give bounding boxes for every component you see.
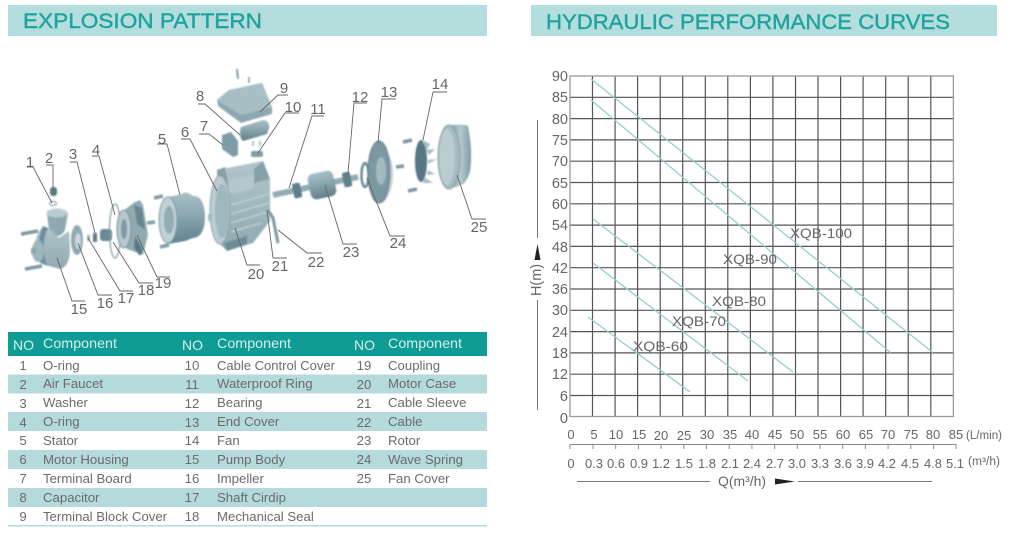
pump body with bolts <box>21 208 70 269</box>
part numbers: 18 <box>138 282 154 299</box>
table column 2: Cable Control Cover <box>217 358 336 373</box>
x axis m3/h labels: 0.3 <box>585 456 603 471</box>
x axis m3/h labels: 3.3 <box>811 456 829 471</box>
part numbers: 16 <box>97 295 113 312</box>
table column 2: 12 <box>185 396 199 411</box>
heading: hydraulic performance curves: HYDRAULIC PERFORMANCE CURVES <box>546 11 950 34</box>
y axis labels: 0 <box>560 411 568 427</box>
x axis m3/h labels: (m³/h) <box>968 456 1000 468</box>
part numbers: 9 <box>280 80 288 97</box>
table column 3: Cable Sleeve <box>388 395 466 410</box>
table column 1: Terminal Board <box>43 471 132 486</box>
fan <box>415 139 437 183</box>
table column 2: 13 <box>185 415 199 430</box>
x axis L/min labels: 15 <box>632 427 646 442</box>
y axis labels: 60 <box>552 197 568 213</box>
y axis labels: 90 <box>552 69 568 85</box>
x axis L/min labels: 5 <box>590 427 598 442</box>
table column 3: Coupling <box>388 358 440 373</box>
x axis m3/h labels: 2.4 <box>743 456 761 471</box>
part numbers: 24 <box>390 235 406 252</box>
table column 1: 4 <box>19 415 27 430</box>
table column 1: Terminal Block Cover <box>43 509 168 524</box>
x axis L/min labels: 10 <box>609 427 623 442</box>
cable control cover <box>251 141 263 157</box>
part numbers: 8 <box>196 88 204 105</box>
stator <box>159 192 205 244</box>
y axis labels: 36 <box>552 282 568 298</box>
x axis L/min labels: 85 <box>949 427 963 442</box>
table column 2: Bearing <box>217 395 262 410</box>
table column 2: Mechanical Seal <box>217 509 314 524</box>
x axis title with arrow <box>577 473 932 489</box>
table column 1: 6 <box>19 452 27 467</box>
table column 2: 10 <box>185 358 199 373</box>
table header: NO <box>13 337 34 353</box>
table column 3 <box>357 358 466 486</box>
table column 3: Motor Case <box>388 376 456 391</box>
table column 1: O-ring <box>43 414 80 429</box>
x axis m3/h labels: 3.0 <box>788 456 806 471</box>
capacitor <box>240 120 269 141</box>
y axis labels: 24 <box>552 325 568 341</box>
table header: NO <box>182 337 203 353</box>
part numbers: 22 <box>308 254 324 271</box>
x axis L/min labels: 65 <box>859 427 873 442</box>
part numbers: 12 <box>352 89 368 106</box>
x axis m3/h labels: 3.9 <box>856 456 874 471</box>
table column 1: 9 <box>19 509 27 524</box>
y axis labels: 6 <box>560 389 568 405</box>
table header: Component <box>43 335 117 351</box>
x axis L/min labels: 35 <box>723 427 737 442</box>
x axis L/min labels: (L/min) <box>966 430 1002 442</box>
table column 1: Motor Housing <box>43 452 129 467</box>
table column 2: Waterproof Ring <box>217 376 313 391</box>
y axis labels: 75 <box>552 133 568 149</box>
y axis labels: 80 <box>552 112 568 128</box>
part numbers: 15 <box>71 301 87 318</box>
x axis L/min labels: 40 <box>745 427 759 442</box>
air faucet and o-ring <box>50 187 57 206</box>
part numbers: 10 <box>285 99 301 116</box>
part numbers: 4 <box>92 142 100 159</box>
table column 3: Rotor <box>388 433 421 448</box>
y axis labels: 48 <box>552 240 568 256</box>
part numbers: 20 <box>248 266 264 283</box>
table header: Component <box>388 335 462 351</box>
x axis m3/h labels: 2.1 <box>721 456 739 471</box>
rotor assembly <box>273 170 358 200</box>
table column 2: Shaft Cirdip <box>217 490 286 505</box>
y axis labels: 65 <box>552 176 568 192</box>
table column 1: 3 <box>19 396 27 411</box>
table column 1: Air Faucet <box>43 376 103 391</box>
table column 3: Fan Cover <box>388 471 450 486</box>
table column 2: 16 <box>185 471 199 486</box>
terminal board <box>222 132 238 157</box>
x axis L/min labels: 60 <box>836 427 850 442</box>
part numbers: 7 <box>200 118 208 135</box>
impeller <box>71 225 83 255</box>
end cover with bolts <box>368 140 417 203</box>
x axis L/min labels: 70 <box>881 427 895 442</box>
y axis labels: 85 <box>552 90 568 106</box>
x axis L/min labels: 45 <box>768 427 782 442</box>
table header: NO <box>354 337 375 353</box>
curve labels: XQB-80 <box>712 293 766 309</box>
heading: explosion pattern: EXPLOSION PATTERN <box>23 10 262 33</box>
part numbers: 6 <box>181 124 189 141</box>
y axis labels <box>552 69 568 427</box>
x axis L/min labels: 75 <box>904 427 918 442</box>
part numbers: 23 <box>343 244 359 261</box>
x axis m3/h labels <box>567 456 1000 471</box>
x axis L/min labels: 55 <box>813 427 827 442</box>
y axis labels: 42 <box>552 261 568 277</box>
part numbers: 1 <box>26 154 34 171</box>
wave spring <box>362 163 368 187</box>
fan cover <box>438 124 471 189</box>
curve labels: XQB-100 <box>790 225 852 241</box>
exploded view diagram <box>21 69 487 318</box>
table column 3: Cable <box>388 414 422 429</box>
x axis title with arrow: Q(m³/h) <box>718 473 766 489</box>
x axis m3/h labels: 0.6 <box>607 456 625 471</box>
table column 1: 2 <box>19 377 27 392</box>
table column 3: 22 <box>357 415 371 430</box>
curve labels <box>633 225 852 354</box>
table column 2: Impeller <box>217 471 265 486</box>
curve labels: XQB-70 <box>672 313 726 329</box>
part numbers: 17 <box>118 290 134 307</box>
part numbers: 14 <box>432 76 448 93</box>
table column 1: 1 <box>19 358 27 373</box>
x axis m3/h labels: 0 <box>567 456 575 471</box>
part numbers: 13 <box>381 84 397 101</box>
table column 3: Wave Spring <box>388 452 463 467</box>
y axis labels: 12 <box>552 367 568 383</box>
y axis labels: 30 <box>552 303 568 319</box>
x axis m3/h labels: 0.9 <box>630 456 648 471</box>
heading: explosion pattern <box>8 5 487 36</box>
table column 2: 14 <box>185 433 199 448</box>
y axis title with arrow: H(m) <box>529 264 545 296</box>
table column 1: O-ring <box>43 358 80 373</box>
table column 1 <box>19 358 168 524</box>
table column 2: Fan <box>217 433 240 448</box>
x axis m3/h labels: 4.2 <box>878 456 896 471</box>
washer, clip and seal <box>87 229 112 242</box>
x axis L/min labels: 30 <box>700 427 714 442</box>
part numbers: 5 <box>158 131 166 148</box>
table column 3: 25 <box>357 471 371 486</box>
part numbers <box>26 76 487 318</box>
y axis labels: 54 <box>552 218 568 234</box>
x axis m3/h labels: 3.6 <box>834 456 852 471</box>
table header: Component <box>217 335 291 351</box>
x axis L/min labels: 50 <box>790 427 804 442</box>
part numbers: 2 <box>45 150 53 167</box>
x axis L/min labels: 80 <box>926 427 940 442</box>
x axis m3/h labels: 4.5 <box>901 456 919 471</box>
performance curves <box>588 79 933 392</box>
flange bolts <box>147 196 169 247</box>
x axis L/min labels: 25 <box>677 428 691 443</box>
table column 2: 15 <box>185 452 199 467</box>
table column 3: 24 <box>357 452 371 467</box>
y axis labels: 18 <box>552 346 568 362</box>
motor housing and case <box>208 161 278 251</box>
terminal block cover <box>217 69 272 123</box>
table column 2 <box>185 358 336 524</box>
table column 1: 8 <box>19 490 27 505</box>
table column 2: 17 <box>185 490 199 505</box>
table column 1: Capacitor <box>43 490 100 505</box>
o-ring seal <box>110 204 120 258</box>
part numbers: 19 <box>155 275 171 292</box>
x axis L/min labels: 0 <box>567 427 575 442</box>
x axis ticks <box>570 444 956 449</box>
leader lines <box>27 92 486 301</box>
table stripes <box>8 374 487 526</box>
x axis m3/h labels: 1.8 <box>698 456 716 471</box>
x axis m3/h labels: 5.1 <box>946 456 964 471</box>
components table <box>8 332 487 526</box>
x axis m3/h labels: 4.8 <box>924 456 942 471</box>
part numbers: 25 <box>471 219 487 236</box>
table column 1: 5 <box>19 433 27 448</box>
table column 3: 21 <box>357 396 371 411</box>
x axis m3/h labels: 1.5 <box>675 456 693 471</box>
table column 2: End Cover <box>217 414 280 429</box>
table header <box>8 332 487 356</box>
table column 1: Washer <box>43 395 89 410</box>
table column 3: 23 <box>357 433 371 448</box>
part numbers: 21 <box>272 258 288 275</box>
part numbers: 11 <box>310 101 326 118</box>
x axis L/min labels: 20 <box>654 428 668 443</box>
table column 2: 11 <box>185 377 199 392</box>
table column 3: 20 <box>357 377 371 392</box>
curve labels: XQB-60 <box>633 338 688 354</box>
table column 2: Pump Body <box>217 452 286 467</box>
coupling flange <box>117 200 148 256</box>
table column 1: Stator <box>43 433 79 448</box>
part numbers: 3 <box>69 146 77 163</box>
y axis title with arrow <box>529 120 545 410</box>
heading: hydraulic performance curves <box>531 5 997 36</box>
performance chart <box>529 69 1002 489</box>
y axis labels: 70 <box>552 154 568 170</box>
x axis L/min labels <box>567 427 1002 443</box>
x axis m3/h labels: 1.2 <box>652 456 670 471</box>
table column 2: 18 <box>185 509 199 524</box>
table column 3: 19 <box>357 358 371 373</box>
curve labels: XQB-90 <box>723 251 777 267</box>
table column 1: 7 <box>19 471 27 486</box>
x axis m3/h labels: 2.7 <box>766 456 784 471</box>
chart grid <box>570 76 953 416</box>
